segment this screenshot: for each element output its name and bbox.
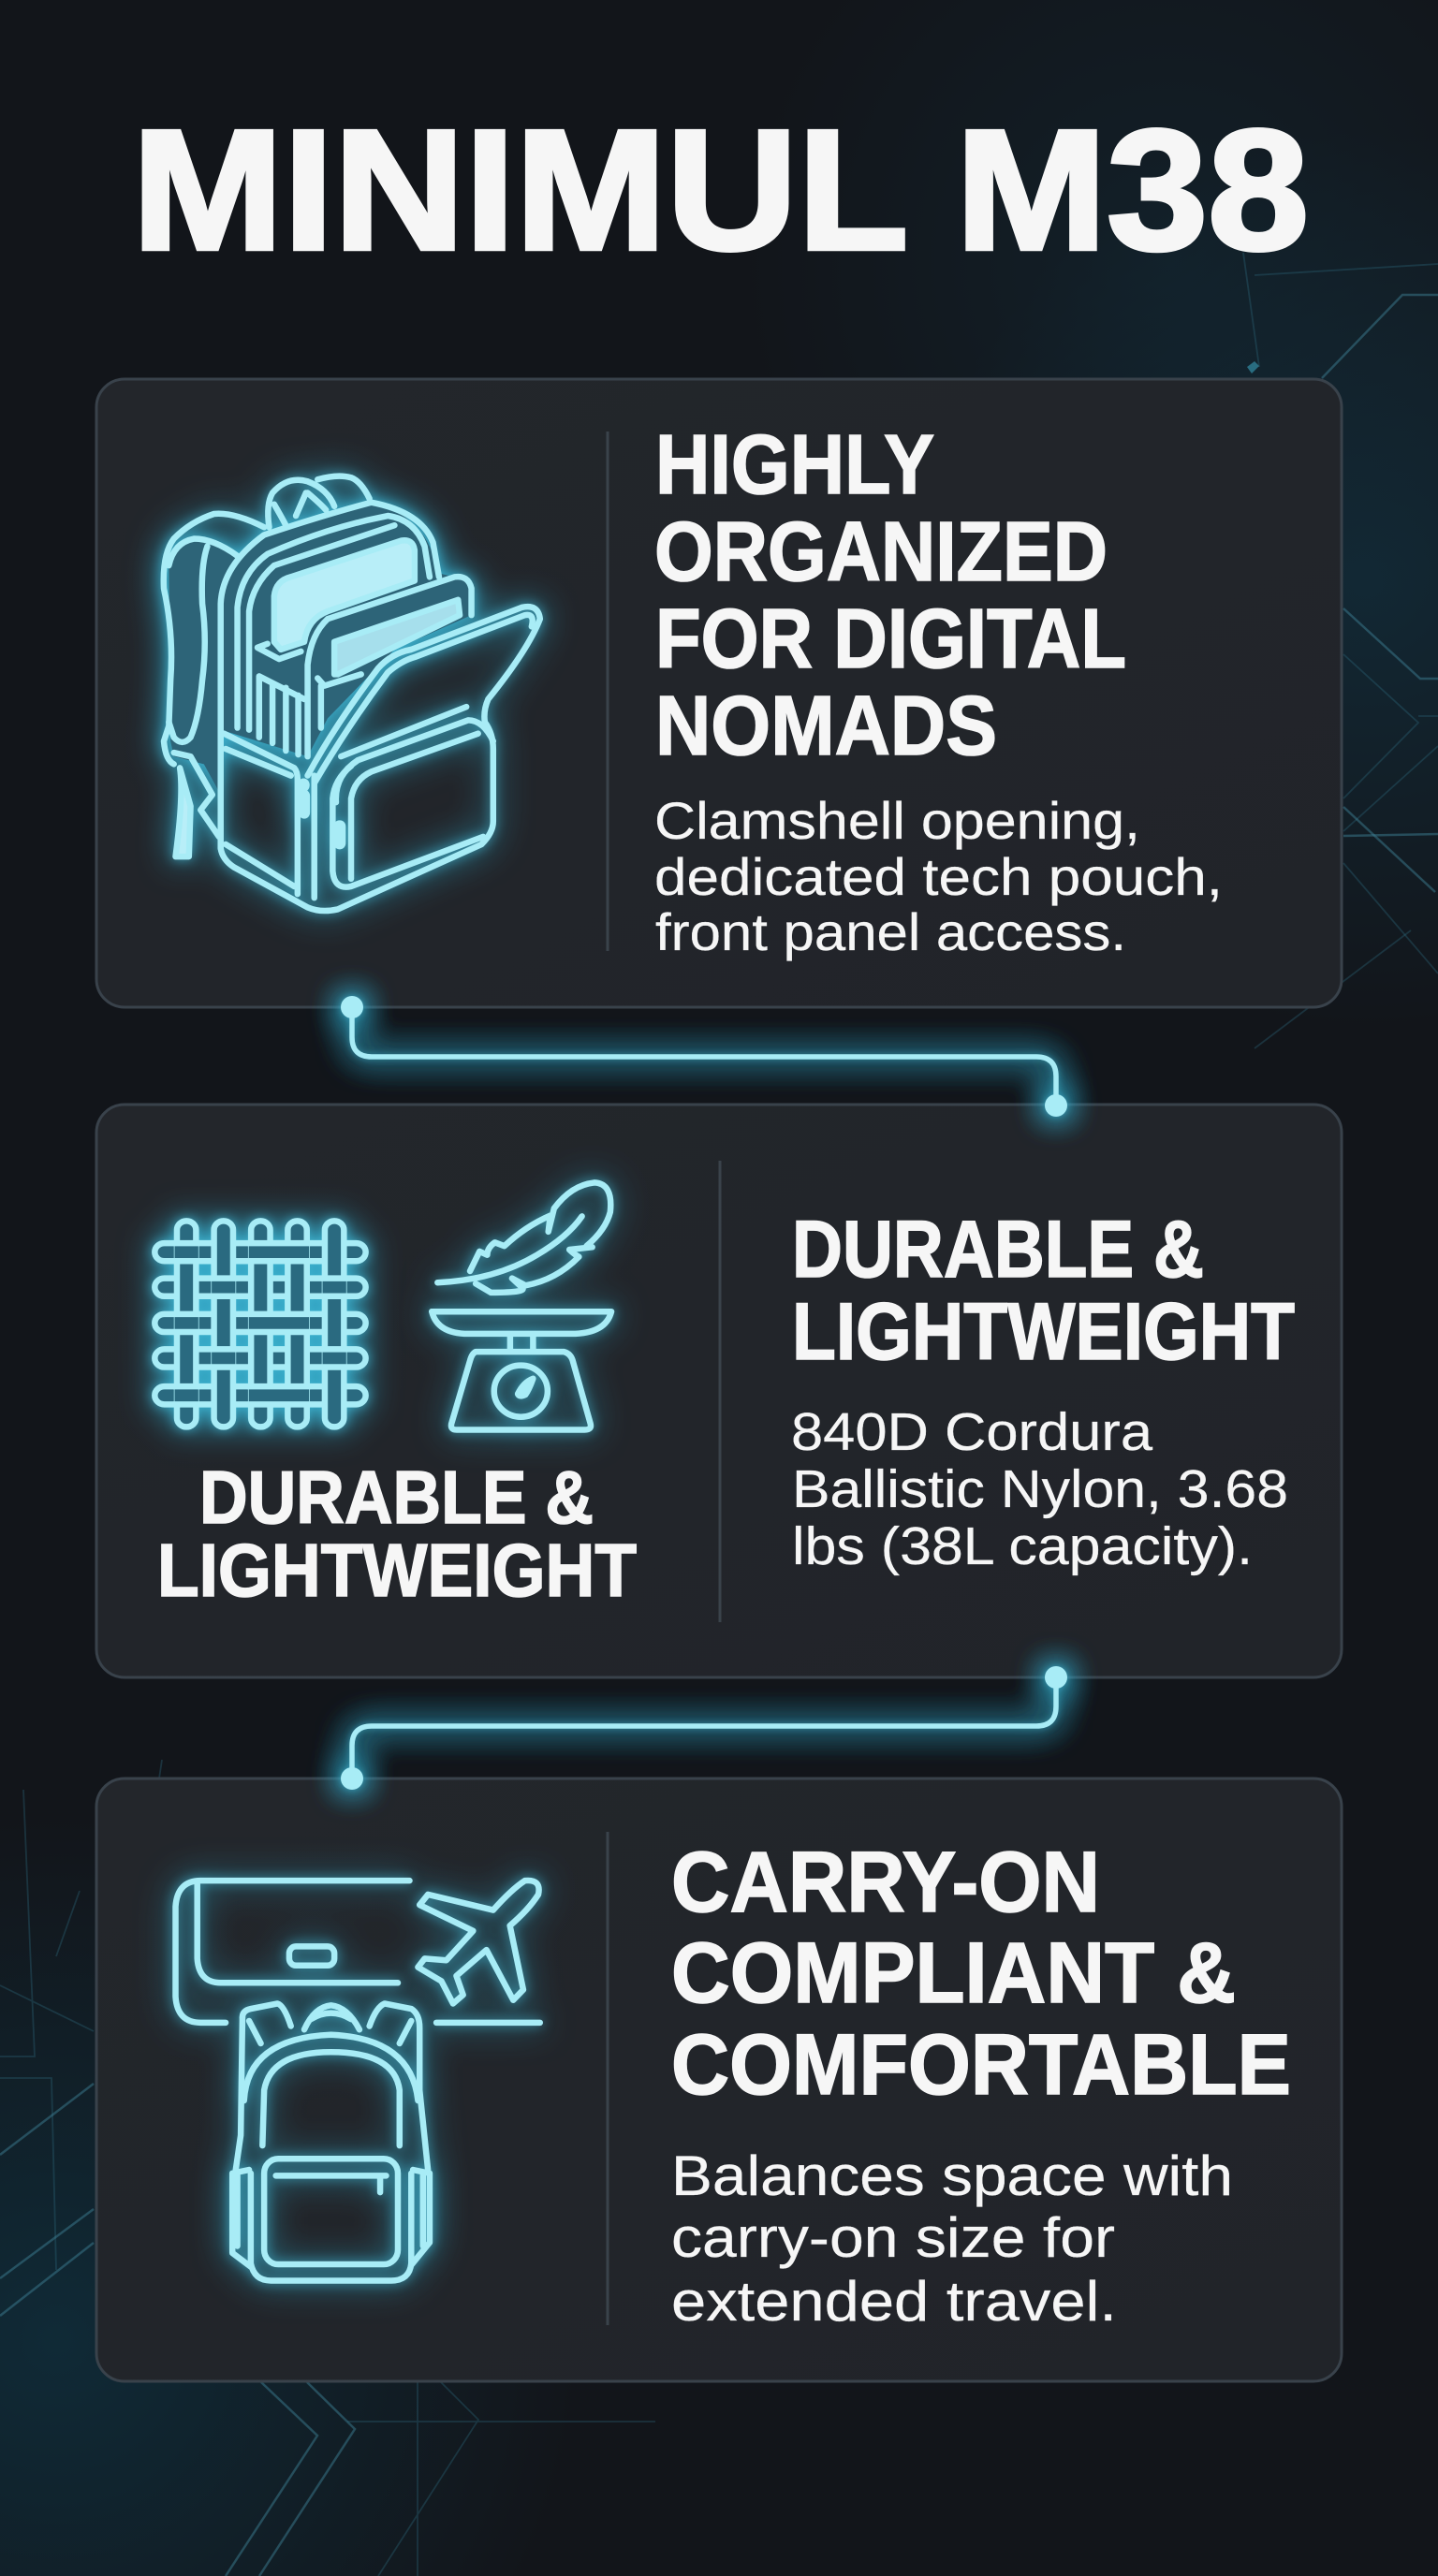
body text: balances space: extended travel. bbox=[671, 2270, 1117, 2333]
body text: cordura bbox=[791, 1402, 1288, 1576]
icon: airplane and backpack bbox=[175, 1881, 540, 2280]
divider bbox=[607, 432, 609, 951]
title: MINIMUL M38 bbox=[132, 94, 1309, 285]
connector: panel one to panel two bbox=[341, 996, 1067, 1117]
heading: highly organized for digital nomads: ORGANIZED bbox=[654, 505, 1108, 599]
heading: carry-on compliant and comfortable: CARRY-ON bbox=[671, 1835, 1100, 1930]
heading: highly organized for digital nomads: NOMADS bbox=[655, 680, 997, 773]
heading: durable and lightweight: DURABLE & bbox=[792, 1205, 1204, 1295]
body text: clamshell: front panel access. bbox=[655, 902, 1126, 961]
heading: durable and lightweight bbox=[792, 1205, 1295, 1377]
connector: panel two to panel three bbox=[341, 1666, 1067, 1790]
body text: clamshell: dedicated tech pouch, bbox=[654, 847, 1223, 906]
heading: highly organized for digital nomads: FOR DIGITAL bbox=[655, 593, 1126, 686]
icon: feather on scale bbox=[432, 1182, 611, 1429]
panel: durable and lightweight bbox=[96, 1105, 1342, 1677]
icon caption: durable and lightweight: LIGHTWEIGHT bbox=[157, 1529, 637, 1612]
heading: durable and lightweight: LIGHTWEIGHT bbox=[792, 1287, 1295, 1377]
body text: balances space: Balances space with bbox=[671, 2144, 1233, 2207]
icon: fabric weave bbox=[154, 1221, 366, 1427]
icon caption: durable and lightweight: DURABLE & bbox=[199, 1456, 594, 1539]
body text: balances space: carry-on size for bbox=[671, 2206, 1115, 2269]
icon caption: durable and lightweight bbox=[157, 1456, 637, 1612]
body text: cordura: Ballistic Nylon, 3.68 bbox=[792, 1459, 1288, 1519]
body text: cordura: 840D Cordura bbox=[791, 1402, 1152, 1462]
heading: highly organized for digital nomads: HIGHLY bbox=[655, 418, 934, 512]
divider bbox=[719, 1161, 721, 1622]
icon: open backpack bbox=[164, 476, 540, 911]
panel: highly organized bbox=[96, 379, 1342, 1007]
heading: carry-on compliant and comfortable bbox=[671, 1835, 1291, 2113]
divider bbox=[607, 1832, 609, 2325]
body text: balances space bbox=[671, 2144, 1233, 2333]
body text: clamshell: Clamshell opening, bbox=[654, 791, 1140, 850]
heading: carry-on compliant and comfortable: COMPLIANT & bbox=[671, 1925, 1236, 2021]
panel: carry-on compliant bbox=[96, 1778, 1342, 2381]
body text: clamshell bbox=[654, 791, 1223, 961]
heading: highly organized for digital nomads bbox=[654, 418, 1126, 773]
heading: carry-on compliant and comfortable: COMFORTABLE bbox=[671, 2017, 1291, 2113]
body text: cordura: lbs (38L capacity). bbox=[792, 1516, 1253, 1576]
